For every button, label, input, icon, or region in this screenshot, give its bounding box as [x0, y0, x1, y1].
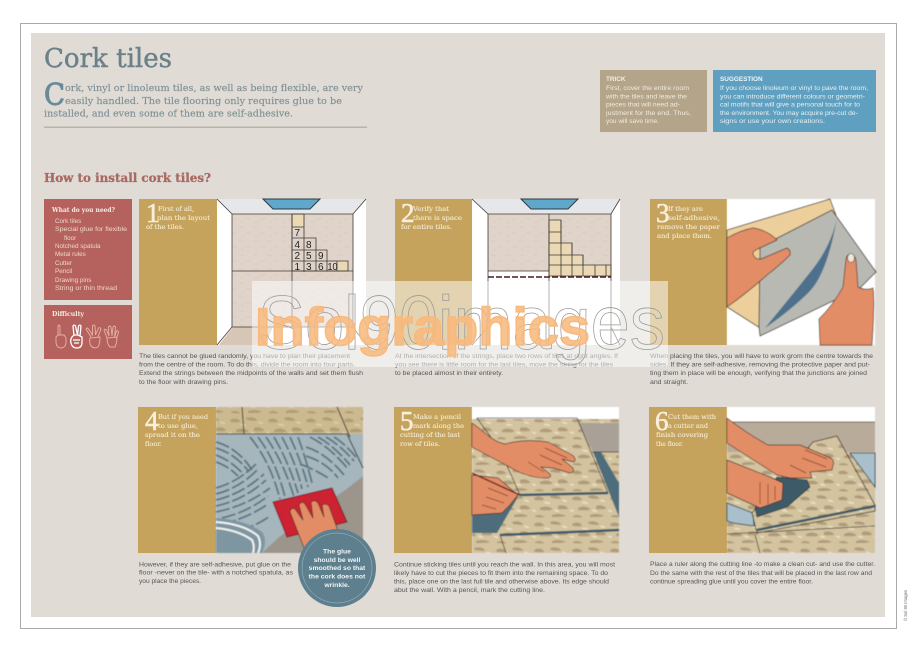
icon: hand three fingers [86, 325, 101, 348]
step 2 body text: you see there is little room for the last tiles, move the string for the tiles [395, 362, 613, 368]
panel: trick [600, 70, 707, 132]
step 6 body text: continue spreading glue until you cover the entire floor. [650, 578, 813, 586]
step 2 gold panel [395, 199, 472, 345]
panel: suggestion [713, 70, 876, 132]
step 1 illustration: room plan: 10 [328, 262, 338, 273]
step 1 body text [139, 353, 363, 386]
step 1 illustration: room plan: 1 [294, 262, 300, 273]
step 3 lead text: self-adhesive, [668, 214, 720, 222]
panel: trick: pieces that will need ad- [606, 102, 680, 108]
step 3 lead text: and place them. [657, 232, 712, 240]
step 4 lead text: floor. [145, 440, 162, 448]
step 6 lead text: finish covering [656, 431, 708, 439]
step 2 lead text: there is space [413, 214, 462, 222]
step 4 lead text: to use glue, [158, 422, 198, 430]
step 3 body text: sides. If they are self-adhesive, removing the protective paper and put- [650, 362, 870, 368]
icon: hand one finger [56, 325, 66, 348]
panel: what do you need: Notched spatula [55, 243, 101, 250]
step 1 illustration: room plan: 2 [294, 251, 300, 262]
step 1 lead text: 1 [146, 198, 160, 228]
step 2 lead text: Verify that [412, 205, 449, 213]
panel: trick: TRICK [606, 76, 626, 83]
step 6 gold panel [649, 407, 727, 553]
step 4 body text: you place the pieces. [139, 578, 201, 585]
panel: suggestion: signs or use your own creations. [720, 118, 825, 125]
step 5 body text: Continue sticking tiles until you reach the wall. In this area, you will most [394, 562, 615, 568]
callout: glue tip: the cork does not [309, 574, 366, 580]
icon: hand four fingers [104, 326, 118, 347]
panel: what do you need: What do you need? [51, 206, 115, 214]
step 4 lead text: But if you need [158, 413, 208, 421]
title: Cork tiles [44, 44, 172, 74]
panel: what do you need [44, 199, 132, 300]
panel: trick: justment for the end. Thus, [605, 110, 691, 117]
step 1 lead text: of the tiles. [146, 223, 184, 231]
callout: glue tip: should be well [314, 557, 361, 564]
callout: glue tip: wrinkle. [323, 582, 350, 589]
step 6 body text: Place a ruler along the cutting line -to make a clean cut- and use the cutter. [650, 561, 875, 568]
step 1 illustration: room plan: 7 [294, 228, 300, 239]
panel: what do you need: Cork tiles [55, 218, 81, 225]
step 1 lead text: First of all, [158, 205, 194, 213]
step 2 body text: At the intersection of the strings, place two rows of tiles at right angles. If [395, 353, 618, 360]
step 4 body text: floor -never on the tile- with a notched spatula, as [139, 570, 293, 576]
step 1 illustration: room plan: 3 [306, 262, 312, 273]
step 1 body text: Extend the strings between the midpoints of the walls and set them flush [139, 370, 363, 377]
step 3 lead text: 3 [656, 198, 670, 228]
image credit: © Sol 90 Images [903, 590, 908, 621]
step 1 illustration: room plan [217, 199, 366, 345]
panel: what do you need: floor [64, 235, 76, 242]
step 1 gold panel [139, 199, 217, 345]
step 1 body text: to the floor with drawing pins. [139, 379, 228, 386]
step 6 lead text: Cut them with [668, 413, 716, 421]
step 6 lead text: the floor. [656, 440, 683, 448]
panel: suggestion: you can introduce different colours or geometri- [720, 94, 865, 100]
step 5 lead text: row of tiles. [400, 440, 440, 448]
step 1 illustration: room plan: 6 [318, 262, 324, 273]
step 5 [394, 406, 619, 594]
callout: glue tip: smoothed so that [309, 565, 366, 572]
step 5 gold panel [394, 407, 472, 553]
panel: what do you need: Metal rules [55, 251, 86, 258]
intro text [44, 78, 364, 120]
step 1 [139, 198, 366, 386]
panel: trick: with the tiles and leave the [605, 94, 688, 100]
section heading: How to install cork tiles? [44, 170, 211, 185]
step 5 lead text: mark along the [413, 422, 464, 430]
intro text: C [44, 78, 65, 113]
step 1 illustration: room plan: 9 [318, 251, 324, 262]
step 5 body text: abut the wall. With a pencil, mark the cutting line. [394, 587, 545, 594]
step 2 body text [395, 353, 618, 377]
step 3 illustration: peeling tile [727, 199, 876, 345]
step 4 lead text [145, 406, 208, 448]
step 1 illustration: room plan: 8 [306, 240, 312, 251]
step 2 body text: to be placed almost in their entirety. [395, 370, 503, 377]
step 3 body text: ting them in place will be enough, verifying that the junctions are joined [650, 370, 867, 377]
step 4 body text [139, 562, 293, 585]
panel: what do you need: Drawing pins [55, 277, 91, 284]
step 4 lead text: spread it on the [145, 431, 200, 439]
panel: suggestion: SUGGESTION [720, 76, 763, 83]
step 1 illustration: room plan: 4 [294, 240, 300, 251]
panel: what do you need: Cutter [55, 260, 72, 267]
step 2 lead text: 2 [401, 198, 414, 228]
step 6 lead text [655, 406, 716, 448]
step 3 body text: and straight. [650, 379, 688, 386]
step 5 lead text [400, 406, 464, 448]
intro text: ork, vinyl or linoleum tiles, as well as being flexible, are very [65, 83, 364, 94]
step 1 body text: from the centre of the room. To do this, divide the room into four parts. [139, 362, 355, 368]
step 5 lead text: cutting of the last [400, 431, 460, 439]
panel: what do you need: String or thin thread [55, 285, 118, 292]
intro text: installed, and even some of them are self-adhesive. [44, 108, 293, 120]
step 2 lead text: for entire tiles. [401, 223, 452, 231]
step 6 [649, 406, 875, 586]
step 1 lead text [146, 198, 210, 231]
step 5 body text: likely have to cut the pieces to fit them into the remaining space. To do [394, 570, 608, 577]
panel: suggestion: the environment. You may acquire pre-cut de- [720, 110, 858, 117]
step 4 [138, 406, 376, 607]
icon: hand two fingers selected [71, 325, 82, 348]
panel: suggestion: If you choose linoleum or vinyl to pave the room, [720, 85, 868, 92]
panel: trick: you will save time. [606, 118, 659, 125]
step 6 body text: Do the same with the rest of the tiles that will be placed in the last row and [650, 570, 872, 577]
step 6 body text [650, 561, 875, 586]
step 5 body text [394, 562, 615, 594]
panel: suggestion: cal motifs that will give a personal touch for to [720, 102, 861, 108]
step 5 lead text: Make a pencil [413, 413, 461, 421]
step 3 lead text [656, 198, 721, 240]
panel: difficulty: Difficulty [52, 310, 84, 318]
step 3 lead text: If they are [668, 205, 703, 213]
step 6 lead text: a cutter and [668, 422, 708, 430]
step 6 illustration: cutting tile [727, 407, 875, 553]
callout: glue tip: The glue [323, 548, 351, 556]
step 1 lead text: plan the layout [157, 214, 210, 222]
step 5 lead text: 5 [400, 406, 414, 436]
step 5 illustration: pencil marking [472, 407, 619, 553]
step 4 lead text: 4 [145, 406, 159, 436]
step 3 gold panel [650, 199, 727, 345]
step 6 lead text: 6 [655, 406, 668, 436]
step 3 [650, 198, 876, 386]
panel: what do you need: Special glue for flexible [55, 226, 128, 233]
step 1 body text: The tiles cannot be glued randomly, you have to plan their placement [139, 353, 350, 360]
step 5 body text: this, place one on the last full tile and otherwise above. Its edge should [394, 578, 609, 586]
watermark overlay: Sol90images [258, 281, 665, 366]
step 2 lead text [401, 198, 462, 231]
step 3 body text: When placing the tiles, you will have to work grom the centre towards the [650, 353, 873, 360]
step 4 body text: However, if they are self-adhesive, put glue on the [139, 562, 291, 568]
step 2 [395, 198, 620, 377]
step 2 illustration: room with strings [472, 199, 620, 345]
panel: trick: First, cover the entire room [606, 85, 689, 92]
step 1 illustration: room plan: 5 [306, 251, 312, 262]
step 4 illustration: spreading glue [216, 407, 363, 553]
step 3 body text [650, 353, 873, 386]
intro text: easily handled. The tile flooring only requires glue to be [65, 96, 342, 107]
panel: what do you need: Pencil [55, 268, 72, 275]
step 4 gold panel [138, 407, 216, 553]
callout: glue tip [298, 529, 376, 607]
step 3 lead text: remove the paper [657, 223, 721, 231]
watermark overlay: Infographics [255, 298, 590, 357]
panel: difficulty [44, 305, 132, 359]
